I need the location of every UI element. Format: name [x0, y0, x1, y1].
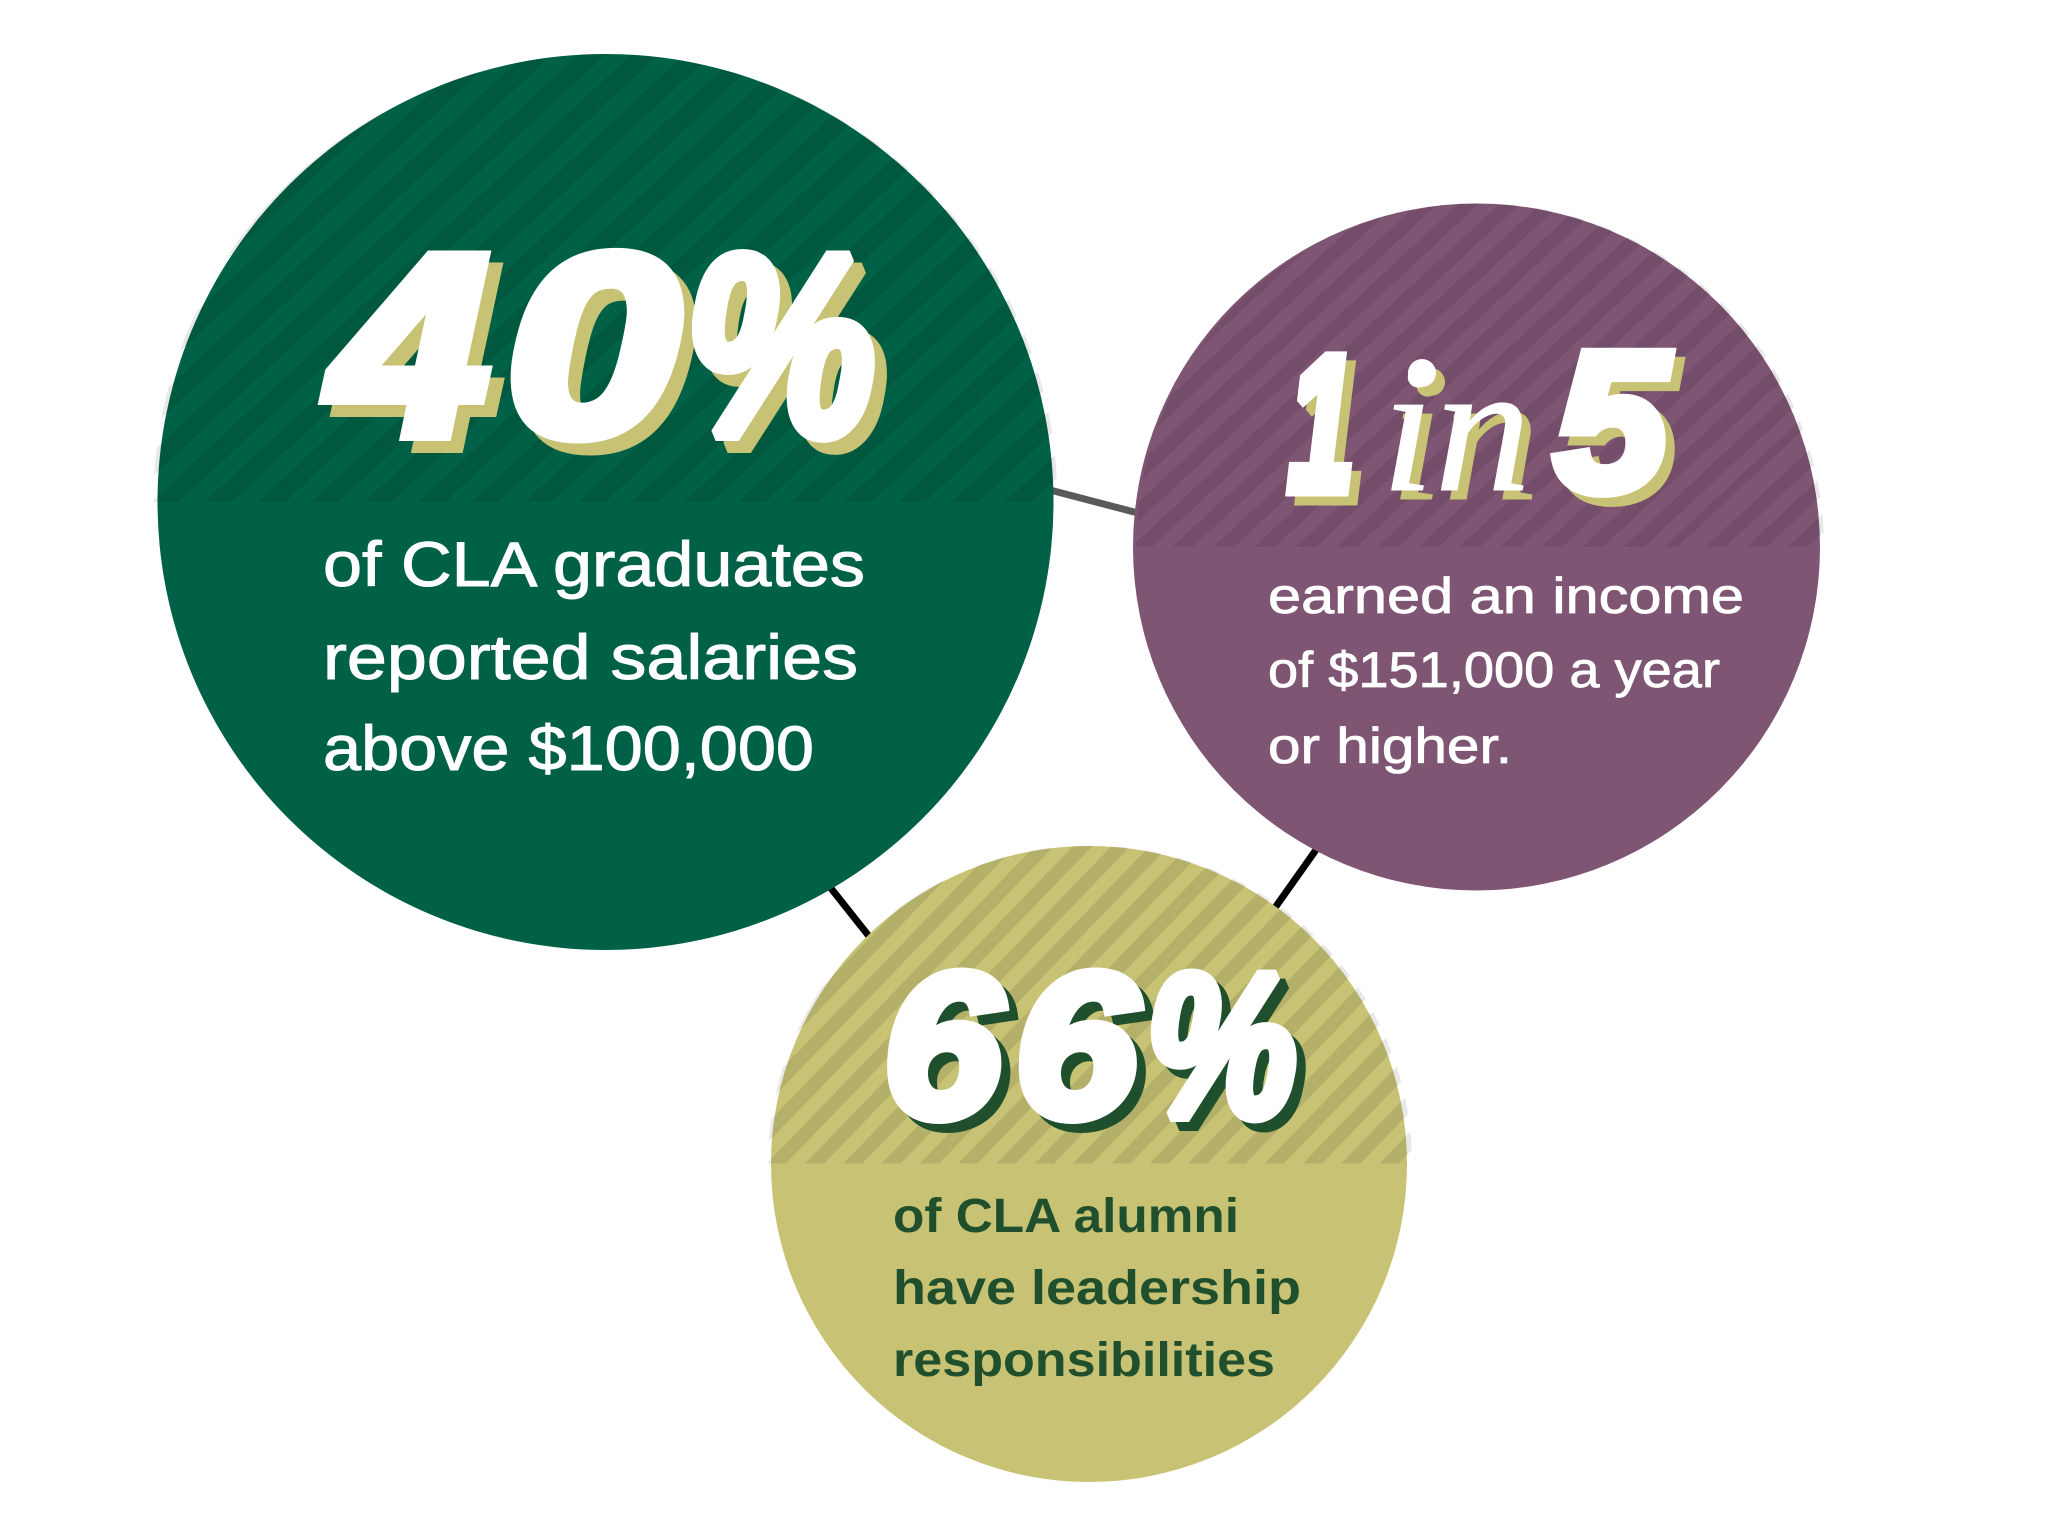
stat: 1 in 5: 1 — [1297, 325, 1363, 540]
text: 66% description: responsibilities — [893, 1334, 1275, 1387]
panel: 40% green circle — [154, 54, 1057, 950]
stat: 1 in 5: 5 — [1555, 311, 1670, 532]
text: 1 in 5 description: or higher. — [1268, 718, 1512, 774]
stat: 66% — [884, 932, 1306, 1169]
text: 40% description — [323, 530, 865, 784]
text: 66% description — [893, 1190, 1301, 1387]
text: 1 in 5 description: of $151,000 a year — [1268, 642, 1720, 698]
stat: 66%: 6 — [884, 932, 1003, 1160]
stat: 66%: % — [1146, 932, 1296, 1160]
text: 40% description: of CLA graduates — [323, 530, 865, 600]
stat: 1 in 5: 5 — [1564, 320, 1679, 541]
connector: purple to olive — [1272, 847, 1318, 912]
stat: 66%: 6 — [1024, 941, 1148, 1169]
panel: 1 in 5 purple circle — [1133, 204, 1824, 890]
stat: 1 in 5: in — [1390, 335, 1540, 540]
connector: green to olive — [826, 882, 872, 940]
stat: 1 in 5: in — [1381, 326, 1531, 531]
stat: 40%: 4 — [334, 212, 501, 502]
stat: 1 in 5: 1 — [1288, 316, 1354, 531]
stat: 40%: 4 — [322, 200, 489, 490]
text: 40% description: above $100,000 — [323, 714, 814, 784]
text: 40% description: reported salaries — [323, 623, 858, 693]
stat: 40%: 0 — [506, 200, 680, 490]
connector: green to purple — [1050, 490, 1138, 513]
stat: 66%: 6 — [892, 941, 1012, 1169]
text: 1 in 5 description — [1268, 568, 1744, 774]
stat: 40%: % — [686, 200, 876, 490]
text: 66% description: of CLA alumni — [893, 1190, 1239, 1243]
stat: 66%: % — [1156, 941, 1306, 1169]
text: 1 in 5 description: earned an income — [1268, 568, 1744, 624]
stat: 1 in 5 — [1288, 311, 1679, 541]
stat: 66%: 6 — [1015, 932, 1139, 1160]
panel: 66% olive circle — [768, 846, 1412, 1482]
text: 66% description: have leadership — [893, 1262, 1301, 1315]
stat: 40% — [322, 200, 888, 502]
stat: 40%: 0 — [518, 212, 692, 502]
stat: 40%: % — [698, 212, 888, 502]
